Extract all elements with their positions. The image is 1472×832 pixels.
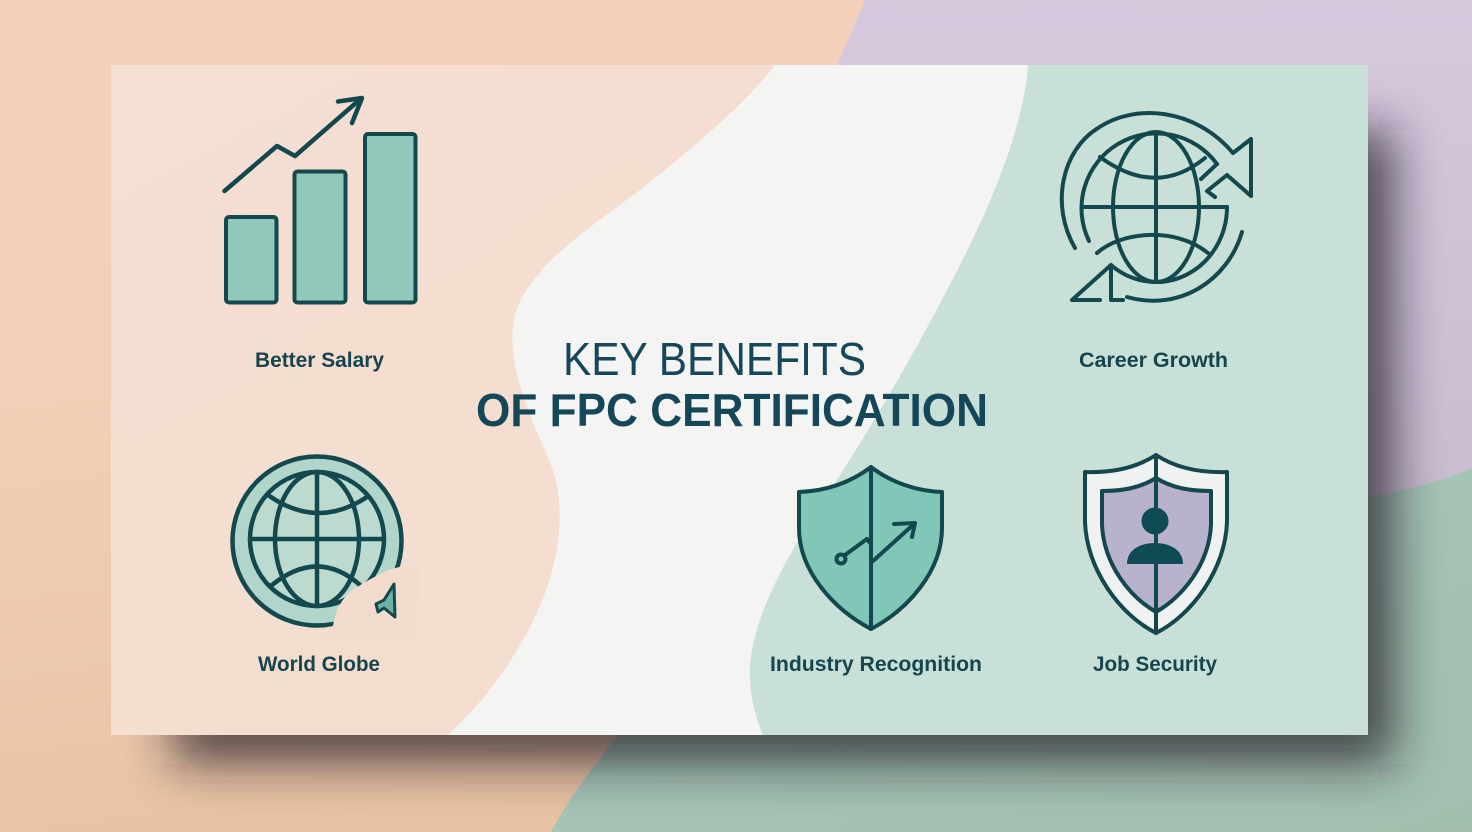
label: Job Security: Job Security (1093, 653, 1217, 676)
label: World Globe: World Globe (258, 653, 380, 676)
card shadow (172, 130, 1394, 764)
person (1127, 508, 1183, 564)
icon: job security shield (1085, 455, 1227, 633)
icon: industry recognition shield (799, 467, 942, 629)
title (476, 333, 988, 436)
panel: main card (111, 65, 1368, 735)
bite in globe (320, 566, 420, 640)
icon: better salary bar chart (224, 98, 416, 302)
label: Industry Recognition: Industry Recognition (770, 653, 982, 676)
panel: white centre wave (448, 65, 1028, 735)
panel: green right wave (750, 65, 1368, 735)
title: OF FPC CERTIFICATION (476, 384, 988, 436)
label: Better Salary: Better Salary (255, 349, 384, 372)
title: KEY BENEFITS (563, 333, 866, 385)
label: Career Growth: Career Growth (1079, 349, 1228, 372)
small arrow (376, 584, 395, 617)
icon: career growth globe (1062, 113, 1251, 301)
icon: world globe (232, 456, 420, 640)
